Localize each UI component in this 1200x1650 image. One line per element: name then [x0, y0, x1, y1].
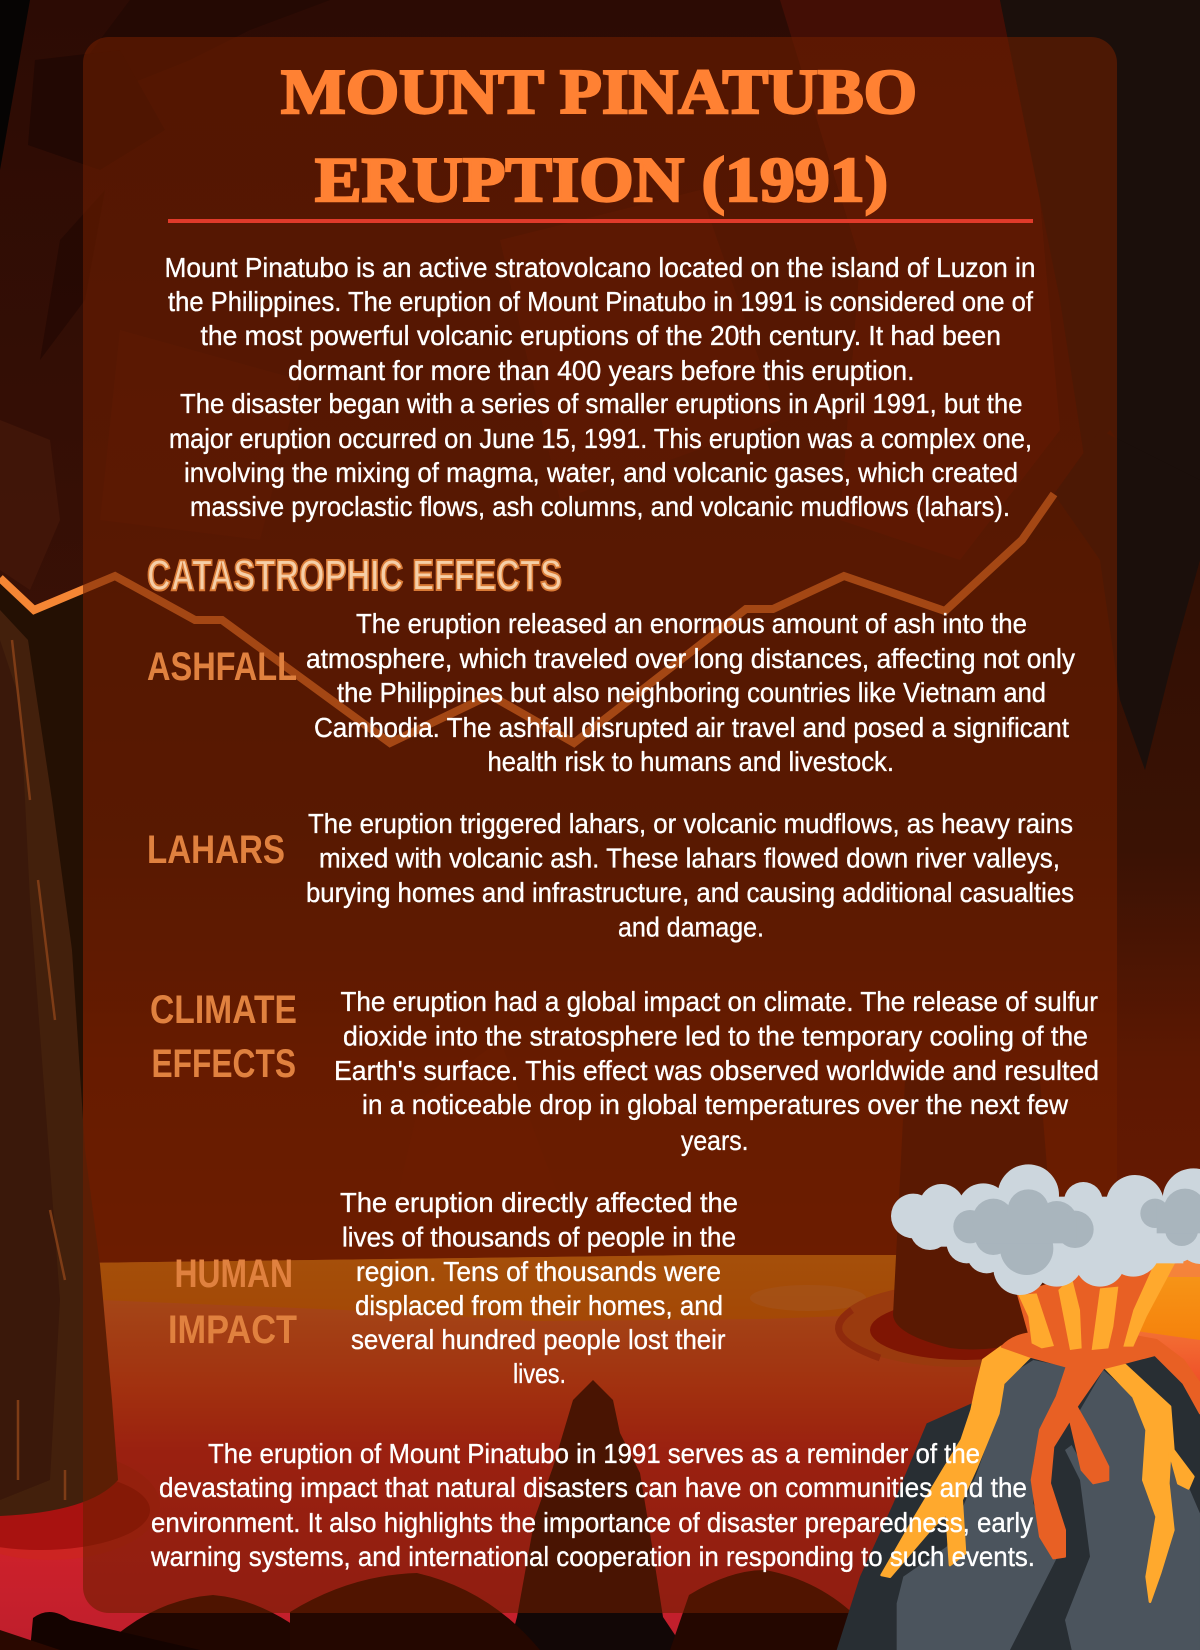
- text block: ashfall: [306, 608, 1075, 777]
- label: climate effects: EFFECTS: [152, 1042, 296, 1086]
- text block: lahars: The eruption triggered lahars, or volcanic mudflows, as heavy rains: [308, 808, 1073, 839]
- text block: lahars: [306, 808, 1074, 942]
- text block: conclusion: devastating impact that natural disasters can have on communities and the: [159, 1472, 1027, 1503]
- text block: human impact: lives of thousands of people in the: [342, 1222, 736, 1252]
- text block: ashfall: The eruption released an enormous amount of ash into the: [356, 608, 1027, 639]
- icon: erupting volcano: [837, 1164, 1200, 1650]
- text block: introduction: major eruption occurred on June 15, 1991. This eruption was a complex one,: [169, 423, 1032, 454]
- lava ripples around left column: [0, 1450, 160, 1560]
- text block: climate effects: years.: [681, 1125, 748, 1156]
- section: climate effects: [150, 986, 1099, 1156]
- text block: conclusion: The eruption of Mount Pinatubo in 1991 serves as a reminder of the: [208, 1438, 980, 1469]
- text block: introduction: [164, 252, 1036, 522]
- text block: ashfall: the Philippines but also neighboring countries like Vietnam and: [337, 677, 1046, 708]
- heading: catastrophic effects: CATASTROPHIC EFFECTS: [147, 551, 562, 600]
- text block: introduction: the most powerful volcanic eruptions of the 20th century. It had been: [200, 320, 1001, 351]
- label: human impact: IMPACT: [168, 1308, 297, 1352]
- left rock column: [0, 578, 118, 1516]
- text block: introduction: dormant for more than 400 years before this eruption.: [288, 355, 914, 386]
- text block: introduction: involving the mixing of magma, water, and volcanic gases, which created: [184, 457, 1018, 488]
- text block: introduction: Mount Pinatubo is an active stratovolcano located on the island of Luzon in: [164, 252, 1036, 283]
- text block: climate effects: Earth's surface. This effect was observed worldwide and resulted: [334, 1055, 1099, 1086]
- title: MOUNT PINATUBO: [281, 57, 917, 127]
- lower wall below lava crack: [0, 430, 1200, 1270]
- label: lahars: LAHARS: [147, 828, 285, 872]
- title: [281, 57, 917, 215]
- title: ERUPTION (1991): [315, 145, 888, 215]
- text block: introduction: massive pyroclastic flows, ash columns, and volcanic mudflows (lahars).: [190, 491, 1010, 522]
- yellow lava streams: [882, 1347, 1193, 1602]
- label: human impact: [168, 1252, 297, 1352]
- text block: human impact: displaced from their homes, and: [355, 1290, 723, 1321]
- text block: human impact: The eruption directly affected the: [340, 1187, 738, 1218]
- label: ashfall: ASHFALL: [147, 645, 297, 689]
- text block: climate effects: [334, 986, 1099, 1156]
- orange lava ring and streams: [1002, 1333, 1200, 1558]
- eruption column: [1017, 1258, 1175, 1350]
- label: climate effects: [150, 988, 297, 1086]
- text block: human impact: region. Tens of thousands were: [356, 1256, 721, 1287]
- text block: introduction: the Philippines. The eruption of Mount Pinatubo in 1991 is considered one of: [168, 286, 1033, 317]
- section: ashfall: [147, 608, 1075, 777]
- text block: conclusion: warning systems, and international cooperation in responding to such events.: [150, 1541, 1035, 1572]
- text block: ashfall: health risk to humans and livestock.: [488, 746, 894, 777]
- text block: ashfall: Cambodia. The ashfall disrupted air travel and posed a significant: [314, 712, 1069, 743]
- lava lake: [0, 1255, 1200, 1650]
- text block: human impact: [340, 1187, 738, 1389]
- section: lahars: [147, 808, 1074, 942]
- text block: climate effects: dioxide into the stratosphere led to the temporary cooling of the: [343, 1020, 1088, 1052]
- right rock trunk behind volcano: [838, 1080, 1082, 1367]
- right stalactite: [1000, 0, 1200, 770]
- text block: climate effects: in a noticeable drop in global temperatures over the next few: [362, 1089, 1069, 1120]
- text block: lahars: mixed with volcanic ash. These lahars flowed down river valleys,: [319, 842, 1060, 874]
- text block: conclusion: environment. It also highlights the importance of disaster preparedness, early: [151, 1507, 1033, 1538]
- rock facets upper wall: [0, 0, 1060, 590]
- section: human impact: [168, 1187, 738, 1389]
- text block: lahars: and damage.: [618, 912, 764, 942]
- text block: ashfall: atmosphere, which traveled over long distances, affecting not only: [306, 643, 1075, 674]
- foreground boulders: [0, 1570, 860, 1650]
- title divider: [168, 219, 1033, 223]
- ash cloud shadow: [953, 1189, 1200, 1275]
- lava crack line: [0, 494, 1054, 743]
- text block: introduction: The disaster began with a series of smaller eruptions in April 1991, but the: [180, 388, 1022, 419]
- text block: conclusion: [150, 1438, 1035, 1572]
- lava lake upper band: [0, 1255, 1200, 1340]
- ash cloud: [891, 1164, 1200, 1295]
- centre stalagmite: [508, 1380, 685, 1650]
- text block: lahars: burying homes and infrastructure, and causing additional casualties: [306, 877, 1074, 908]
- label: climate effects: CLIMATE: [150, 988, 297, 1032]
- text block: human impact: lives.: [513, 1358, 566, 1389]
- text block: human impact: several hundred people lost their: [351, 1324, 726, 1355]
- text block: climate effects: The eruption had a global impact on climate. The release of sulfur: [340, 986, 1098, 1017]
- volcano body: [837, 1355, 1200, 1650]
- label: human impact: HUMAN: [174, 1252, 293, 1296]
